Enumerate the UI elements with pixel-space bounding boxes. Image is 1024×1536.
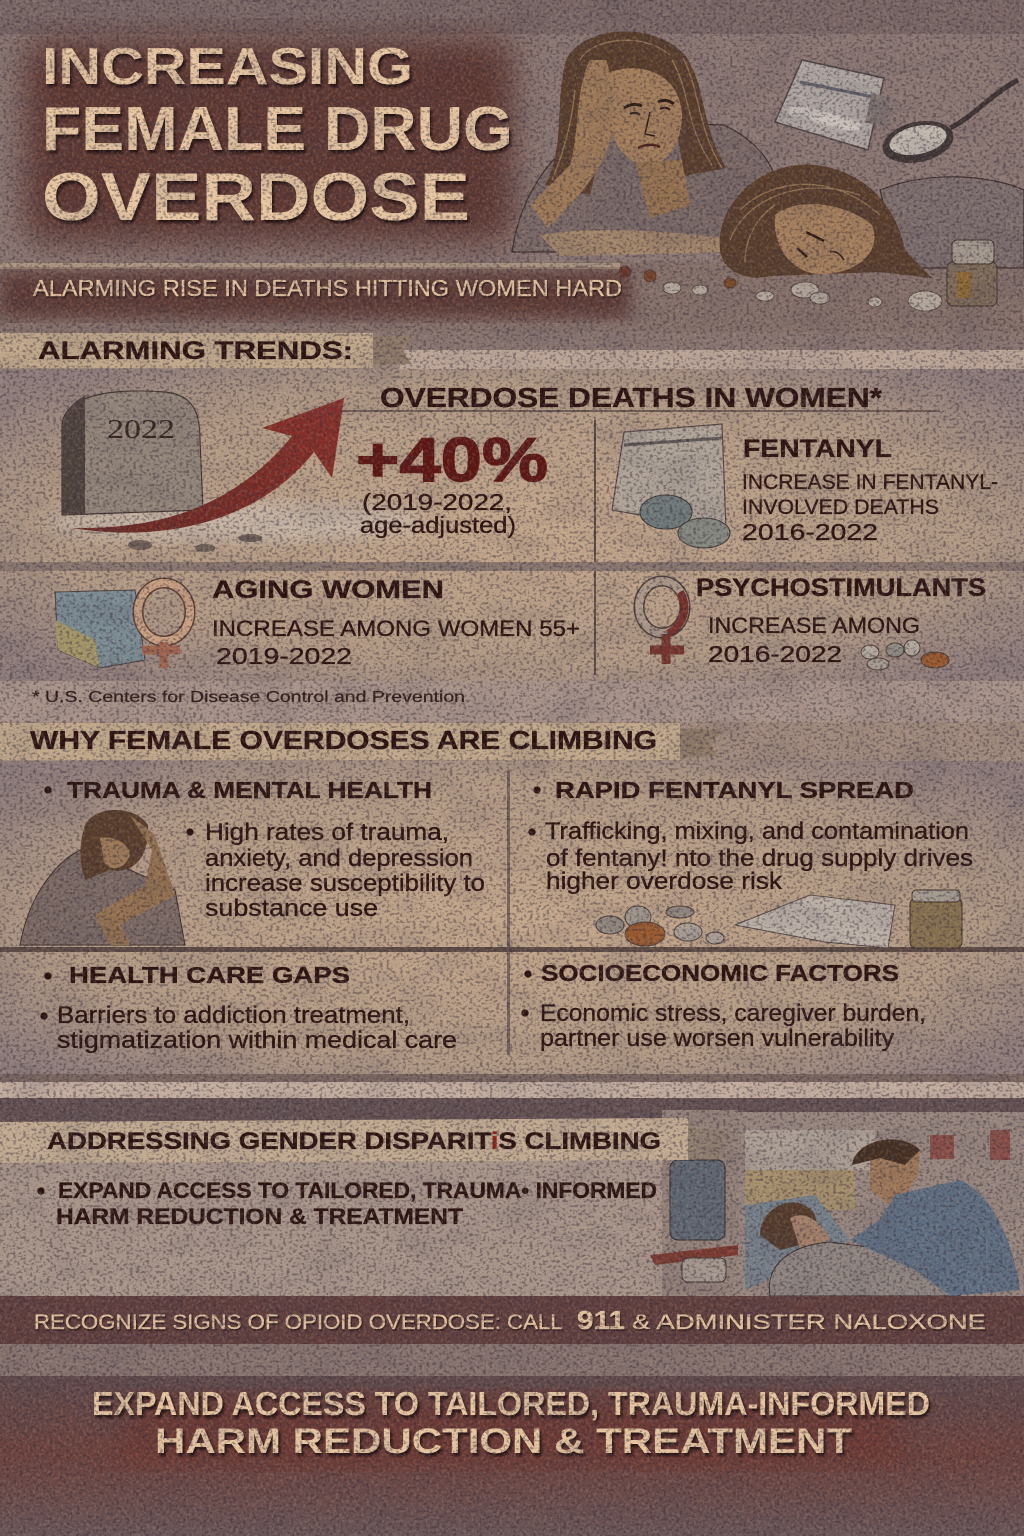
text: trauma and mental health: High rates of trauma, [205,819,449,846]
woman sitting [512,31,780,256]
text: health care gaps: stigmatization within medical care [57,1027,457,1054]
text: trauma and mental health: TRAUMA & MENTAL HEALTH [67,777,432,803]
text: closing message [92,1385,930,1461]
text: psychostimulants: INCREASE AMONG [708,613,920,638]
panel background [0,761,1024,1082]
text: trauma and mental health [44,777,485,922]
icon: red female symbol [639,581,685,664]
title: OVERDOSE [42,159,470,235]
text: aging women: 2019-2022 [216,643,352,669]
text: psychostimulants [696,574,986,667]
icon: drug bag [775,60,891,150]
text: fentanyl: INVOLVED DEATHS [742,496,939,519]
text: trauma and mental health: substance use [205,895,378,922]
ground rubble [45,502,425,552]
panel: title backing [24,38,514,243]
text: socioeconomic factors: Economic stress, caregiver burden, [540,1000,926,1027]
text: trauma and mental health: increase susceptibility to [205,870,485,897]
icon: fentanyl bag and pills [612,424,730,548]
icon: rubble, bag and jar [596,890,962,948]
stat: +40%: +40% [356,426,548,495]
text: rapid fentanyl spread: of fentany! nto the drug supply drives [546,845,973,872]
text: rapid fentanyl spread: higher overdose risk [546,868,783,895]
icon: crouching woman [20,810,185,945]
panel background [0,369,1024,681]
text: aging women: INCREASE AMONG WOMEN 55+ [212,616,580,641]
stat caption: age-adjusted) [360,512,516,538]
text: expand access: HARM REDUCTION & TREATMENT [56,1204,464,1229]
text: socioeconomic factors: partner use worsen vulnerability [540,1025,894,1052]
text: psychostimulants: PSYCHOSTIMULANTS [696,574,986,602]
text: fentanyl [742,435,998,545]
icon: spoon [879,80,1018,169]
text: socioeconomic factors [522,960,926,1052]
ribbon: addressing [0,1118,730,1163]
icon: map and female symbol [55,583,190,668]
text: expand access: EXPAND ACCESS TO TAILORED, TRAUMA• INFORMED [58,1178,657,1203]
text: fentanyl: INCREASE IN FENTANYL- [742,471,998,494]
panel: addressing gender disparities [0,1110,1024,1296]
icon: tombstone: 2022 [107,414,175,444]
heading: overdose deaths: OVERDOSE DEATHS IN WOMEN* [380,382,882,413]
text: recognize signs: RECOGNIZE SIGNS OF OPIOID OVERDOSE: CALL [34,1311,568,1334]
title: INCREASING [42,38,413,96]
text: rapid fentanyl spread: Trafficking, mixing, and contamination [545,818,969,845]
illustration: ambulance with paramedic and patient [650,1110,1024,1296]
panel: call to action strip [0,1296,1024,1536]
text: psychostimulants: 2016-2022 [708,641,842,667]
panel: why female overdoses are climbing [0,723,1024,1082]
ribbon: why climbing [0,723,724,760]
heading: addressing: ADDRESSING GENDER DISPARIT iS CLIMBING [47,1128,661,1155]
text: socioeconomic factors: SOCIOECONOMIC FACTORS [541,960,899,986]
title [42,38,513,235]
arrow: rising trend [72,398,344,533]
text: fentanyl: FENTANYL [743,435,892,463]
heading: alarming trends: ALARMING TRENDS: [38,337,353,365]
text: aging women [212,576,580,669]
text: health care gaps: HEALTH CARE GAPS [69,962,350,988]
pills on table [619,266,942,311]
icon: pill bottle [947,240,997,306]
text: rapid fentanyl spread [528,777,973,895]
panel: alarming trends [0,332,1024,681]
text: closing message: EXPAND ACCESS TO TAILORED, TRAUMA-INFORMED [92,1385,930,1422]
icon: tombstone [62,391,203,515]
illustration: two women with pills, bag and spoon [512,31,1024,311]
ribbon: alarming trends [0,332,1024,370]
woman lying down [720,165,1024,278]
icon: pills [861,640,949,670]
text: health care gaps [40,962,457,1054]
text: fentanyl: 2016-2022 [742,519,878,545]
footnote: * U.S. Centers for Disease Control and Prevention [32,689,465,706]
stat caption [360,489,516,538]
text: health care gaps: Barriers to addiction treatment, [57,1002,410,1029]
text: aging women: AGING WOMEN [212,576,444,604]
heading: why climbing: WHY FEMALE OVERDOSES ARE CLIMBING [30,725,657,755]
text: expand access [38,1178,657,1229]
text: trauma and mental health: anxiety, and depression [205,845,473,872]
title: FEMALE DRUG [42,95,513,164]
stat caption: (2019-2022, [362,489,512,515]
text: rapid fentanyl spread: RAPID FENTANYL SPREAD [555,777,914,803]
subtitle: ALARMING RISE IN DEATHS HITTING WOMEN HARD [33,275,622,301]
panel: subtitle strip [0,263,630,318]
text: recognize signs: & ADMINISTER NALOXONE [632,1311,986,1334]
text: closing message: HARM REDUCTION & TREATMENT [155,1422,852,1461]
text: recognize signs: 911 [577,1305,625,1335]
